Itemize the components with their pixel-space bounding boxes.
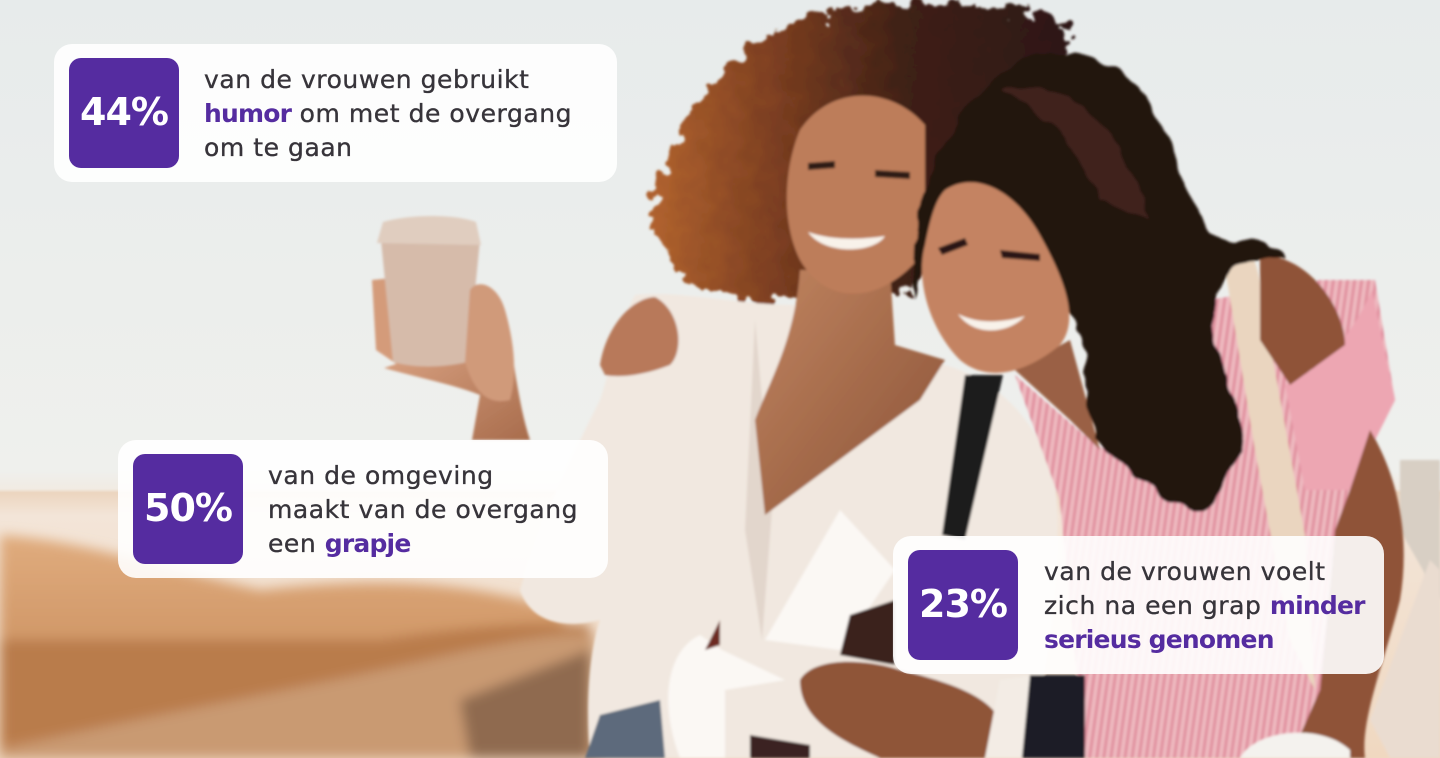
text: 50% statement: van de omgeving xyxy=(268,461,494,490)
badge: 23% xyxy=(908,550,1018,660)
badge: 23%: 23% xyxy=(919,582,1007,626)
badge: 50% xyxy=(133,454,243,564)
hair woman right xyxy=(913,52,1285,510)
face right woman xyxy=(922,182,1069,373)
phone and hand xyxy=(840,600,895,665)
jeans and belt xyxy=(585,700,665,758)
text: 50% statement: maakt van de overgang xyxy=(268,495,578,524)
text: 50% statement xyxy=(268,461,578,558)
card: 50% grapje xyxy=(118,440,608,578)
face left woman xyxy=(787,96,925,294)
card: 44% humor xyxy=(54,44,617,182)
text: 50% statement: een grapje xyxy=(268,529,410,558)
rocks xyxy=(0,535,600,758)
text: 44% statement: humor om met de overgang xyxy=(204,99,572,128)
badge: 50%: 50% xyxy=(144,486,232,530)
left arm and hand with cup xyxy=(384,340,530,440)
text: 44% statement: om te gaan xyxy=(204,133,353,162)
badge: 44% xyxy=(69,58,179,168)
neck right woman xyxy=(1015,340,1100,450)
text: 23% statement: van de vrouwen voelt xyxy=(1044,557,1326,586)
chest and neck left woman xyxy=(755,270,945,515)
coffee cup xyxy=(377,216,481,366)
text: 44% statement xyxy=(204,65,572,162)
hair woman left xyxy=(653,4,1072,300)
text: 23% statement xyxy=(1044,557,1366,654)
hand on shoulder xyxy=(600,297,678,376)
white shirt xyxy=(520,294,1058,758)
text: 44% statement: van de vrouwen gebruikt xyxy=(204,65,530,94)
strap xyxy=(942,375,1003,540)
badge: 44%: 44% xyxy=(80,90,168,134)
pink striped top xyxy=(1015,280,1395,758)
text: 23% statement: serieus genomen xyxy=(1044,625,1274,654)
card: 23% minder serieus xyxy=(893,536,1384,674)
right arm xyxy=(1260,255,1345,385)
text: 23% statement: zich na een grap minder xyxy=(1044,591,1365,620)
